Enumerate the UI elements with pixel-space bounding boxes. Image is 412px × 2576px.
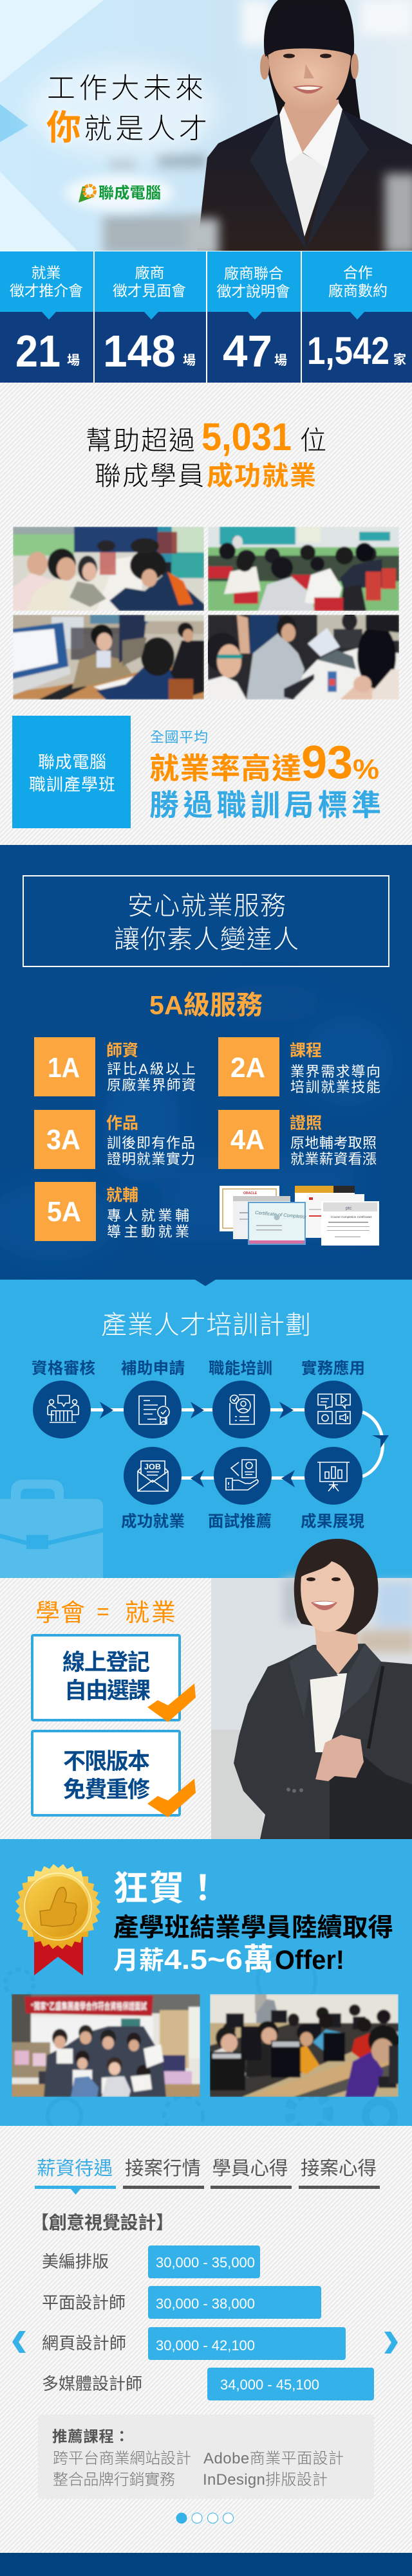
panel: 推薦課程: Adobe商業平面設計	[203, 2450, 344, 2467]
tab: 學員心得: 學員心得	[212, 2158, 288, 2179]
heading: 狂賀！	[113, 1869, 220, 1908]
stat: 廠商徵才見面會 148場: 148	[103, 326, 176, 376]
stat: 廠商徵才見面會 148場: 廠商	[135, 264, 165, 281]
flow connectors and arrows	[91, 1402, 389, 1487]
row: 平面設計師: 30,000 - 38,000	[156, 2296, 255, 2312]
callout: 就業率高達93%: 就業率高達	[149, 752, 301, 785]
heading: 學會 = 就業: =	[97, 1600, 109, 1624]
stat: 合作廠商數約 1,542家: 家	[393, 352, 406, 367]
callout: 就業率高達93%: 93	[301, 737, 353, 788]
service 2A: 課程: 2A	[230, 1052, 265, 1084]
tab: 接案心得	[299, 2158, 380, 2189]
service 5A: 就輔: 導主動就業	[107, 1224, 189, 1240]
service 3A: 作品	[34, 1110, 195, 1169]
heading: 幫助超過 5,031 位 聯成學員成功就業: 成功就業	[207, 461, 316, 491]
tab: 接案行情	[123, 2158, 204, 2189]
panel: 狂賀 congratulation	[0, 1839, 412, 2135]
step labels	[32, 1359, 365, 1530]
certificates collage: ORACLE	[243, 1192, 258, 1195]
service 4A: 證照: 證照	[290, 1114, 322, 1132]
service 5A: 就輔: 專人就業輔	[107, 1208, 189, 1224]
photo: smiling woman in black suit	[187, 0, 412, 257]
stat: 廠商徵才見面會 148場: 徵才見面會	[113, 282, 186, 299]
icon: 成果展現 presentation	[304, 1447, 362, 1505]
stat: 就業徵才推介會 21場: 21	[15, 326, 61, 376]
tabs	[35, 2158, 380, 2195]
stat: 廠商徵才見面會 148場: 場	[183, 353, 196, 368]
panel: 聯成電腦職訓產學班	[12, 716, 131, 828]
footer band	[0, 2553, 412, 2576]
step labels: 實務應用	[301, 1359, 365, 1377]
text: 產學班結業學員陸續取得: 產學班結業學員陸續取得	[113, 1914, 393, 1942]
heading: 幫助超過 5,031 位 聯成學員成功就業	[86, 415, 326, 491]
pagination dots	[176, 2513, 233, 2523]
stat: 就業徵才推介會 21場: 就業	[31, 264, 61, 281]
callout: 就業率高達93%: 勝過職訓局標準	[149, 788, 381, 822]
heading: 狂賀！: ！	[185, 1869, 220, 1908]
hero banner	[0, 0, 412, 257]
stat: 廠商聯合徵才說明會 47場	[207, 251, 301, 383]
tab: 薪資待遇 (active): 薪資待遇	[37, 2158, 113, 2179]
heading: 產業人才培訓計劃	[101, 1311, 311, 1339]
icon: 補助申請 certificate	[124, 1381, 182, 1438]
icon: 面試推薦 hand and resume	[214, 1447, 272, 1505]
stat: 廠商聯合徵才說明會 47場: 場	[274, 353, 287, 368]
panel: 安心就業服務 dark blue section	[0, 845, 412, 1280]
panel: 推薦課程: 整合品牌行銷實務	[53, 2471, 175, 2489]
row: 美編排版: 30,000 - 35,000	[156, 2254, 255, 2271]
callout: 就業率高達93%	[149, 729, 381, 822]
stat: 就業徵才推介會 21場	[0, 251, 93, 383]
row: 美編排版: 美編排版	[42, 2252, 109, 2271]
hero headline: 工作大未來	[47, 73, 203, 104]
row: 網頁設計師	[42, 2327, 346, 2360]
service 4A: 證照: 就業薪資看漲	[290, 1151, 377, 1167]
stat: 合作廠商數約 1,542家	[302, 251, 412, 383]
icon: 職能培訓 profile document	[212, 1381, 270, 1438]
heading: 創意視覺設計: 【創意視覺設計】	[31, 2213, 174, 2233]
service 5A: 就輔: 就輔	[106, 1186, 138, 1204]
row: 多媒體設計師: 34,000 - 45,100	[220, 2377, 319, 2393]
hero headline	[46, 73, 207, 147]
service 1A: 師資: 師資	[106, 1042, 138, 1060]
stat: 廠商聯合徵才說明會 47場: 廠商聯合	[224, 265, 283, 282]
stat: 就業徵才推介會 21場: 徵才推介會	[10, 282, 83, 299]
panel: 產業人才培訓計劃	[0, 1280, 412, 1578]
service 4A: 證照: 原地輔考取照	[290, 1135, 377, 1151]
service 5A: 就輔	[35, 1182, 189, 1241]
service 4A: 證照	[218, 1110, 377, 1169]
panel: 學會 = 就業	[0, 1539, 412, 1839]
panel: 推薦課程: 跨平台商業網站設計	[53, 2450, 191, 2467]
text: 月薪4.5~6萬Offer!: 月薪	[113, 1947, 164, 1975]
service 2A: 課程	[218, 1037, 380, 1096]
icon: gold thumbs-up medal	[15, 1864, 100, 1975]
tab: 接案心得: 接案心得	[301, 2158, 377, 2179]
heading: 5A級服務: 5A級服務	[149, 990, 263, 1020]
row: 平面設計師: 平面設計師	[42, 2293, 126, 2312]
card: 線上登記 自由選課: 自由選課	[64, 1678, 151, 1703]
photo: seminar audience on red chairs	[208, 527, 399, 611]
service 3A: 作品: 3A	[46, 1124, 80, 1156]
callout: 就業率高達93%: %	[353, 754, 379, 785]
photo: students in computer lab	[210, 1994, 398, 2097]
arrow: previous	[12, 2331, 26, 2353]
heading: 學會 = 就業	[35, 1600, 176, 1627]
step labels: 職能培訓	[209, 1359, 272, 1377]
service 1A: 師資	[34, 1037, 196, 1096]
text: 月薪4.5~6萬Offer!: 萬	[243, 1942, 274, 1976]
heading: 幫助超過 5,031 位 聯成學員成功就業: 幫助超過	[86, 426, 195, 455]
text: 月薪4.5~6萬Offer!	[113, 1942, 344, 1976]
panel: 推薦課程: 推薦課程：	[52, 2428, 129, 2445]
service 3A: 作品: 作品	[106, 1114, 138, 1132]
step labels: 資格審核	[32, 1359, 95, 1377]
step labels: 成果展現	[301, 1512, 364, 1530]
icon: briefcase watermark	[0, 1480, 103, 1578]
photo: group with certificates: “獨家”乙盛集團產學合作符合資格保證面試	[31, 2001, 147, 2011]
photo: consultant at desk with computer	[13, 615, 204, 700]
stat: 合作廠商數約 1,542家: 合作	[343, 264, 373, 281]
step labels: 補助申請	[121, 1359, 185, 1377]
stat: 合作廠商數約 1,542家: 1,542	[307, 329, 389, 372]
card: 不限版本 免費重修: 不限版本	[63, 1749, 150, 1774]
row: 多媒體設計師: 多媒體設計師	[42, 2374, 142, 2393]
heading: 學會 = 就業: 就業	[125, 1600, 176, 1627]
row: 多媒體設計師	[42, 2368, 374, 2400]
hero headline: 就是人才	[84, 113, 207, 145]
row: 網頁設計師: 30,000 - 42,100	[156, 2337, 255, 2354]
heading: 幫助超過 5,031 位 聯成學員成功就業: 聯成學員	[95, 461, 204, 491]
callout: 就業率高達93%: 全國平均	[150, 729, 208, 745]
stat: 廠商聯合徵才說明會 47場: 徵才說明會	[216, 283, 290, 300]
service 2A: 課程: 課程	[290, 1042, 322, 1060]
arrow: next	[384, 2332, 398, 2354]
heading: 學會 = 就業: 學會	[35, 1600, 85, 1627]
step labels: 成功就業	[121, 1512, 185, 1530]
text: 月薪4.5~6萬Offer!: Offer!	[275, 1945, 344, 1975]
service 1A: 師資: 評比A級以上	[107, 1061, 196, 1077]
heading: 幫助超過 5,031 位 聯成學員成功就業: 位	[300, 426, 326, 455]
certificates collage: ptc	[346, 1206, 352, 1211]
tab: 薪資待遇 (active)	[35, 2158, 116, 2195]
row: 網頁設計師: 網頁設計師	[42, 2334, 126, 2353]
step labels: 面試推薦	[208, 1512, 272, 1530]
photo: job fair consultation tables	[13, 527, 204, 611]
salary chart	[42, 2245, 374, 2400]
stat: 合作廠商數約 1,542家: 廠商數約	[328, 282, 388, 299]
title box: 安心就業服務	[127, 892, 286, 920]
logo: 聯成電腦: 聯成電腦	[98, 185, 161, 202]
stat: 廠商聯合徵才說明會 47場: 47	[223, 326, 272, 376]
card: 線上登記 自由選課	[32, 1635, 196, 1722]
striped section background	[0, 383, 412, 845]
panel: 推薦課程: InDesign排版設計	[203, 2471, 328, 2489]
service 3A: 作品: 證明就業實力	[107, 1151, 195, 1167]
photo: interview table with tablet	[208, 615, 399, 700]
icon: 成功就業 JOB envelope	[124, 1447, 182, 1505]
service 1A: 師資: 1A	[48, 1052, 80, 1084]
title box	[23, 876, 389, 966]
photo: businesswoman with short hair	[211, 1539, 412, 1839]
card: 線上登記 自由選課: 線上登記	[62, 1650, 150, 1675]
tab: 接案行情: 接案行情	[125, 2158, 201, 2179]
certificates collage: Course Completion Certificates	[331, 1215, 372, 1219]
icon: 成功就業 JOB envelope: JOB	[144, 1462, 161, 1471]
stat: 廠商徵才見面會 148場	[95, 251, 206, 383]
panel: 推薦課程	[38, 2415, 374, 2499]
service 2A: 課程: 培訓就業技能	[290, 1079, 380, 1095]
certificates collage: Certificate of Completion	[255, 1210, 308, 1220]
photo: group with certificates	[12, 1994, 200, 2097]
heading: 幫助超過 5,031 位 聯成學員成功就業: 5,031	[201, 415, 292, 458]
heading: 狂賀！: 狂賀	[113, 1869, 184, 1908]
card: 不限版本 免費重修	[32, 1731, 196, 1817]
certificates collage	[220, 1186, 379, 1246]
service 2A: 課程: 業界需求導向	[290, 1064, 380, 1080]
panel: 聯成電腦職訓產學班: 聯成電腦	[38, 752, 106, 772]
service 1A: 師資: 原廠業界師資	[107, 1077, 196, 1093]
panel: 聯成電腦職訓產學班: 職訓產學班	[29, 775, 115, 794]
striped section background: salary	[0, 2126, 412, 2553]
card: 不限版本 免費重修: 免費重修	[63, 1777, 150, 1802]
stat: 就業徵才推介會 21場: 場	[67, 353, 80, 368]
stats strip	[0, 251, 412, 383]
title box: 讓你素人變達人	[114, 925, 299, 954]
tab: 學員心得	[211, 2158, 292, 2189]
text: 月薪4.5~6萬Offer!: 4.5~6	[164, 1944, 243, 1975]
icon: 資格審核 meeting	[33, 1381, 91, 1438]
row: 美編排版	[42, 2245, 260, 2278]
row: 平面設計師	[42, 2286, 321, 2319]
hero headline: 你	[46, 109, 81, 147]
icon: 實務應用 media bubbles	[304, 1381, 362, 1438]
service 3A: 作品: 訓後即有作品	[107, 1135, 195, 1151]
service 4A: 證照: 4A	[230, 1124, 265, 1156]
service 5A: 就輔: 5A	[47, 1196, 81, 1228]
